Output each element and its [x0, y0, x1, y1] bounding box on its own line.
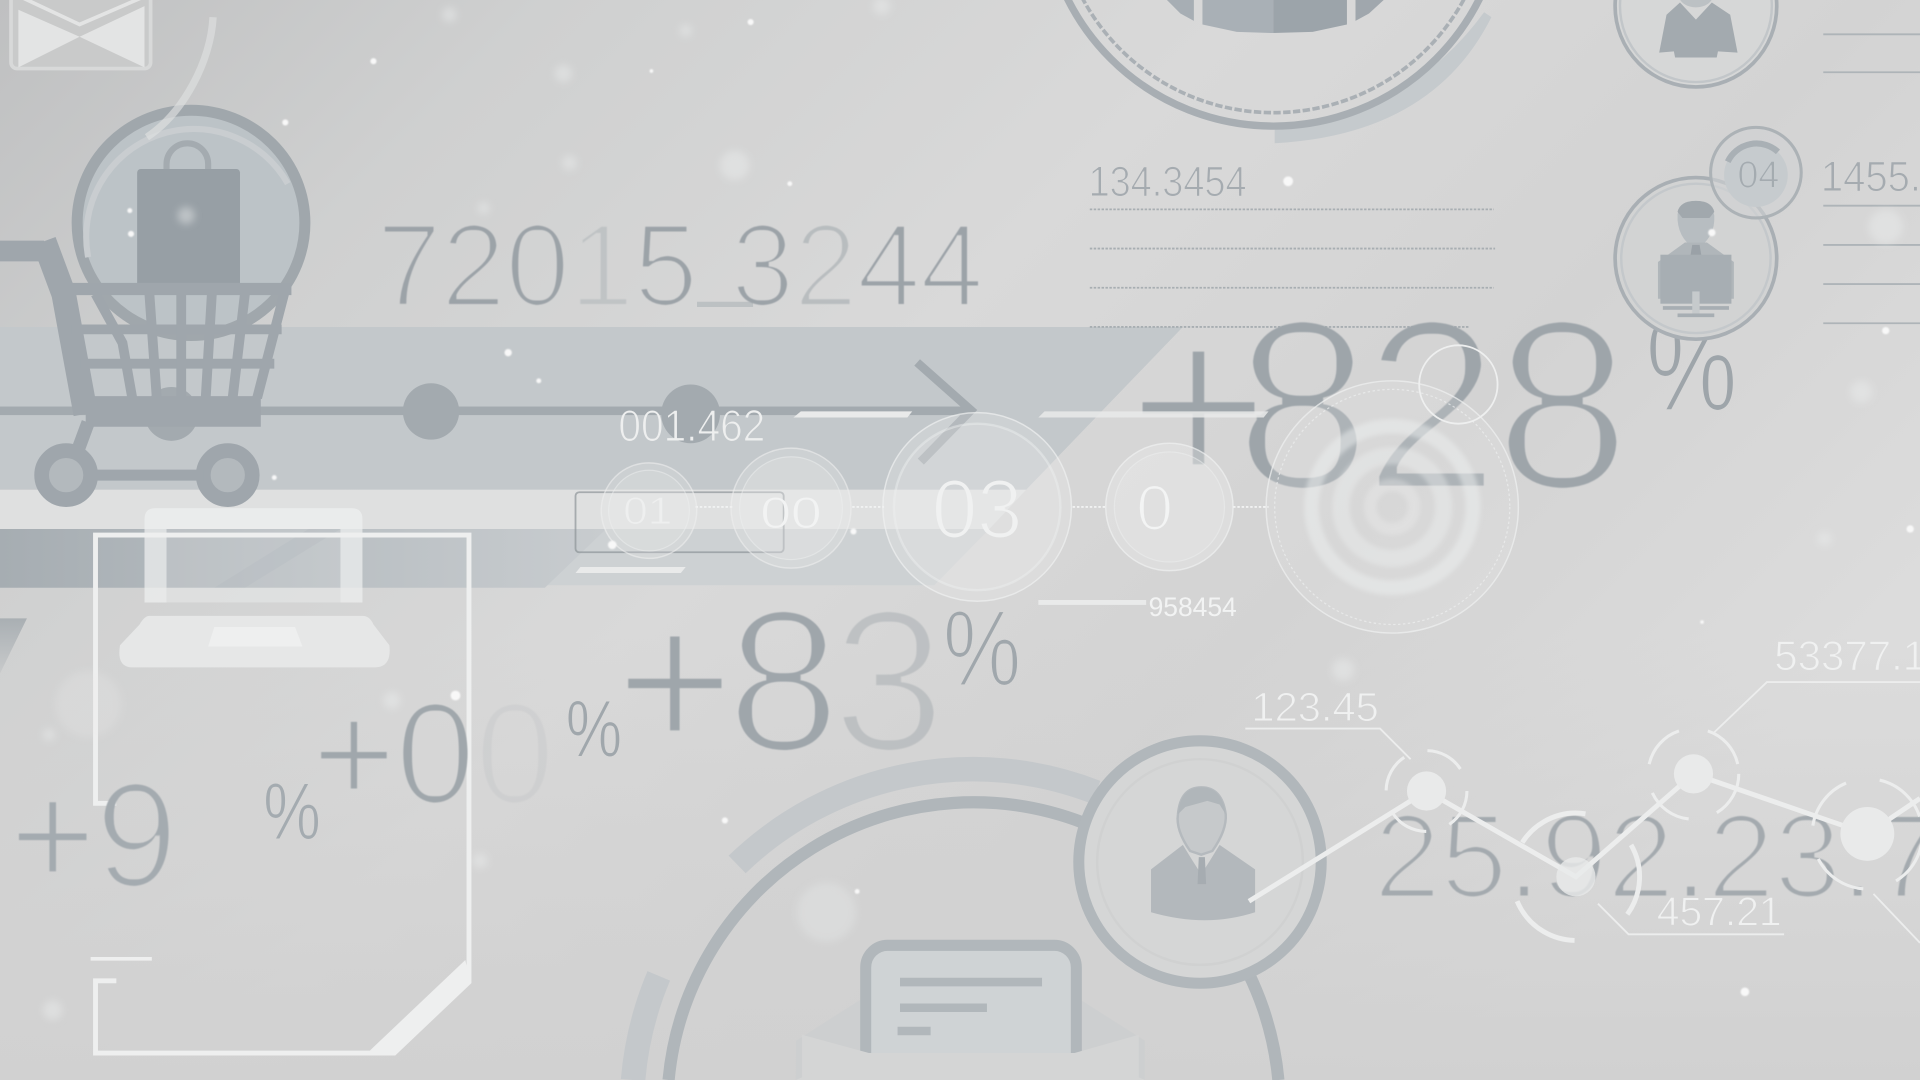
white corner frame [91, 535, 470, 1054]
light grey band with diagonal end [0, 327, 1183, 490]
number circle 04: 04 [1738, 154, 1779, 196]
number: +00%: +00 [312, 672, 555, 834]
number circle 04 [1711, 127, 1801, 218]
number: +828%: 8 [1236, 271, 1370, 541]
bubble 00 [731, 448, 851, 568]
icon: dial centre shape [1167, 0, 1384, 33]
large arc ring bottom with envelope [633, 769, 1278, 1080]
light strip [0, 490, 1026, 529]
number: 72015_3244: _ [696, 199, 754, 309]
small white ring [1419, 345, 1498, 424]
number: +828%: + [1128, 271, 1269, 541]
bubble 00: 00 [760, 489, 822, 538]
icon: shopping cart [0, 241, 291, 500]
number: +828%: 2 [1364, 271, 1499, 541]
top dial with dashed ring [1043, 0, 1504, 143]
label: 457.21: 457.21 [1657, 889, 1782, 935]
person icon circle bottom [1079, 741, 1321, 983]
timeline with arrow and dots [0, 362, 971, 462]
curved white arc [147, 17, 213, 137]
leader lines [1245, 682, 1920, 943]
number: +9%: +9 [10, 752, 178, 919]
label: 958454: 958454 [1149, 592, 1237, 622]
number: +83% [616, 568, 1021, 794]
bubble 01: 01 [623, 490, 672, 533]
number: +9% [10, 752, 321, 919]
connector dots [696, 506, 1269, 508]
number: +83%: + [616, 568, 734, 794]
number: 72015_3244 [377, 199, 983, 331]
target bubble [1266, 381, 1518, 633]
dark band [0, 529, 606, 588]
number: +828%: 8 [1495, 271, 1630, 541]
person icon circle top right [1615, 0, 1777, 87]
person at computer icon circle [1615, 178, 1777, 339]
number: +828%: % [1646, 293, 1738, 438]
line chart with dashed node rings [1245, 682, 1920, 964]
small slanted shape at left [0, 618, 27, 673]
bubble 01 [601, 463, 697, 558]
number: +83%: % [943, 588, 1021, 709]
bubble chain [601, 381, 1518, 633]
white bars [576, 411, 1269, 605]
number: +00%: % [566, 685, 622, 775]
number: 72015_3244: 3244 [731, 200, 983, 331]
number: +828% [1128, 271, 1738, 541]
bubble 0 [1106, 443, 1233, 571]
pale band continuation [545, 529, 989, 585]
label: 123.45: 123.45 [1251, 684, 1379, 730]
envelope icon top left [11, 0, 151, 69]
nodes [1407, 754, 1894, 896]
bubble 0: 0 [1136, 473, 1173, 544]
number: 72015_3244: 72015 [377, 200, 698, 331]
number: +9%: % [263, 767, 321, 857]
number: +83%: 3 [833, 568, 945, 794]
number: 134.3454 with dotted lines: 134.3454 [1089, 158, 1247, 206]
icon: laptop [119, 508, 390, 667]
label: 001.462: 001.462 [618, 402, 765, 451]
icon: shopping bag in circle [77, 110, 305, 336]
node rings [1386, 729, 1920, 889]
number: +83%: 8 [727, 568, 840, 794]
icon: envelope with letter [796, 945, 1145, 1080]
outlined box behind bubbles [576, 492, 784, 552]
bubble 03: 03 [932, 463, 1022, 556]
bubble 03 [883, 413, 1071, 601]
